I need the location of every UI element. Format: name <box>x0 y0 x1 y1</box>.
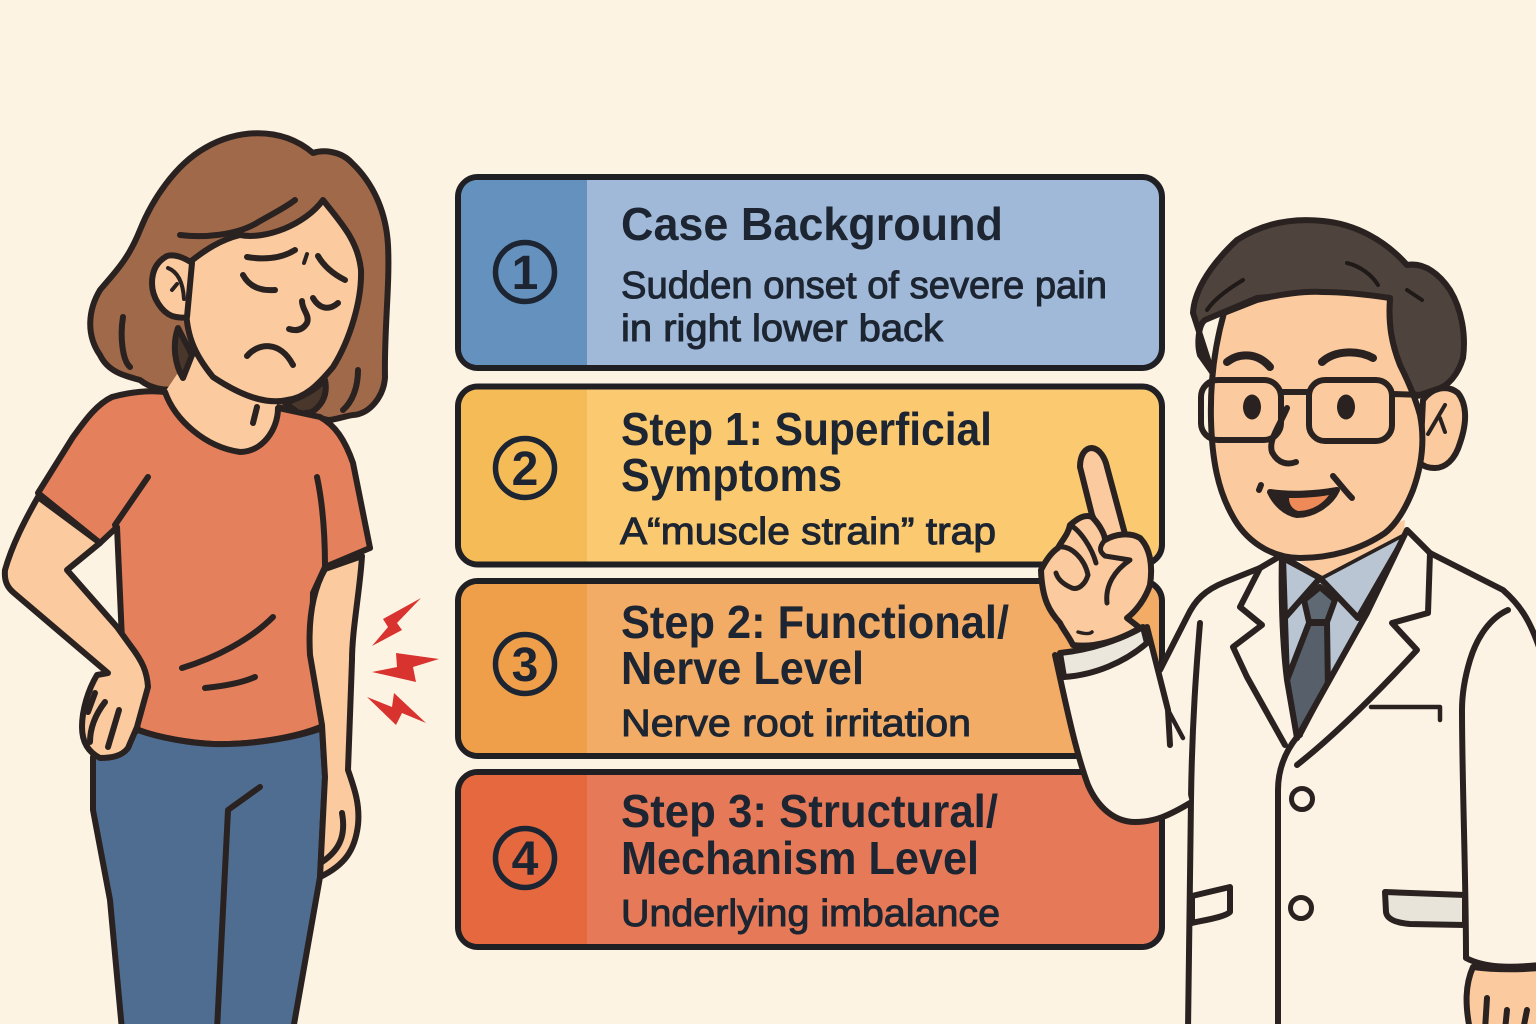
outer hair curl lines <box>122 317 358 410</box>
index finger <box>1080 448 1125 545</box>
finger creases <box>1056 525 1130 603</box>
woman's left arm and hand <box>5 497 148 758</box>
shirt fold lines <box>115 477 325 567</box>
number band 1 <box>461 180 587 365</box>
left lapel <box>1233 555 1297 745</box>
number badge 1 <box>496 242 554 302</box>
woman's pants <box>93 728 325 1024</box>
number band 3 <box>461 584 587 753</box>
woman's hair <box>90 133 388 420</box>
woman's face <box>186 200 361 401</box>
heading: step 1 <box>621 403 992 501</box>
shirt collar <box>1283 533 1407 620</box>
hair shadow left <box>175 328 192 378</box>
doctor's hair <box>1193 220 1464 396</box>
lower right hand <box>1467 967 1536 1024</box>
number band 4 <box>461 775 587 944</box>
heading: step 3: Mechanism Level <box>621 832 979 884</box>
heading: step 1: Step 1: Superficial <box>621 403 992 455</box>
woman's frown <box>247 346 293 365</box>
woman's closed eyes <box>243 275 338 308</box>
coat body <box>1160 530 1536 1024</box>
woman's shirt <box>38 391 370 744</box>
waist fold lines <box>182 617 273 688</box>
doctor <box>1041 220 1536 1024</box>
ear detail <box>168 268 184 299</box>
neck line <box>253 407 257 423</box>
number badge 2: 2 <box>512 443 538 496</box>
woman's ear <box>152 255 192 318</box>
right hand finger line <box>322 813 343 862</box>
text: case description: in right lower back <box>621 308 944 350</box>
number band 2 <box>461 390 587 562</box>
tie <box>1287 587 1335 738</box>
skin at neck <box>1293 520 1405 577</box>
number badge 3 <box>496 634 554 694</box>
wrist crease <box>1078 632 1092 634</box>
doctor's mouth <box>1270 490 1337 515</box>
coat front edge <box>1278 737 1297 1024</box>
woman's neck <box>165 355 278 452</box>
heading: step 2: Step 2: Functional/ <box>621 596 1009 648</box>
pain bolt middle <box>372 653 439 682</box>
heading: step 3 <box>621 785 998 884</box>
doctor's ear <box>1420 388 1465 468</box>
doctor's eyebrows <box>1227 352 1373 367</box>
woman's right arm <box>310 556 362 877</box>
shirt <box>1283 532 1407 735</box>
number badge 4 <box>496 828 554 888</box>
hair shadow right <box>285 380 326 414</box>
heading: case background: Case Background <box>621 198 1003 250</box>
number badge 4: 4 <box>512 833 539 886</box>
left coat pocket <box>1192 887 1230 923</box>
forehead wrinkle <box>304 254 307 263</box>
raised sleeve <box>1055 627 1190 822</box>
cheek marks <box>1259 476 1352 498</box>
text: step 3 description: Underlying imbalance <box>621 893 1000 935</box>
bangs line <box>180 200 295 236</box>
woman's nose <box>289 301 308 330</box>
woman's fingers <box>88 693 119 747</box>
heading: step 2: Nerve Level <box>621 642 864 694</box>
pain bolt top <box>372 598 421 646</box>
woman's eyebrows <box>247 250 345 280</box>
panel: case background <box>458 177 1162 368</box>
woman in pain <box>5 133 439 1024</box>
doctor's eyes <box>1243 394 1355 420</box>
panel: step 2 <box>458 581 1162 756</box>
heading: step 3: Step 3: Structural/ <box>621 785 998 837</box>
number badge 3: 3 <box>512 639 538 692</box>
tongue <box>1289 495 1329 511</box>
ear detail <box>1428 405 1445 434</box>
coat button top <box>1292 788 1312 810</box>
hair strands <box>1207 263 1422 310</box>
right coat pocket <box>1385 892 1465 925</box>
right lapel <box>1297 530 1430 765</box>
doctor's face <box>1211 292 1422 558</box>
breast pocket <box>1371 707 1440 720</box>
text: case description <box>621 265 1107 350</box>
right arm and sleeve <box>1462 610 1536 967</box>
text: step 2 description: Nerve root irritation <box>621 703 971 745</box>
panel: step 3 <box>458 772 1162 947</box>
number badge 1: 1 <box>512 247 538 300</box>
doctor's nose <box>1271 408 1296 463</box>
raised hand <box>1041 448 1151 646</box>
text: case description: Sudden onset of severe pain <box>621 265 1107 307</box>
pants crease <box>217 787 260 1024</box>
tie blade <box>1287 623 1328 738</box>
cuff <box>1060 627 1147 677</box>
panel: step 1 <box>458 386 1162 564</box>
sleeve fold <box>1168 710 1183 738</box>
number badge 2 <box>496 438 554 498</box>
palm <box>1041 516 1151 646</box>
heading: step 2 <box>621 596 1009 694</box>
heading: step 1: Symptoms <box>621 449 842 501</box>
coat outlines <box>1160 553 1536 1024</box>
pain bolt bottom <box>367 693 426 725</box>
glasses <box>1201 380 1424 441</box>
finger lines <box>1485 998 1527 1024</box>
text: step 1 description: A“muscle strain” trap <box>620 511 996 553</box>
coat button bottom <box>1290 898 1312 918</box>
